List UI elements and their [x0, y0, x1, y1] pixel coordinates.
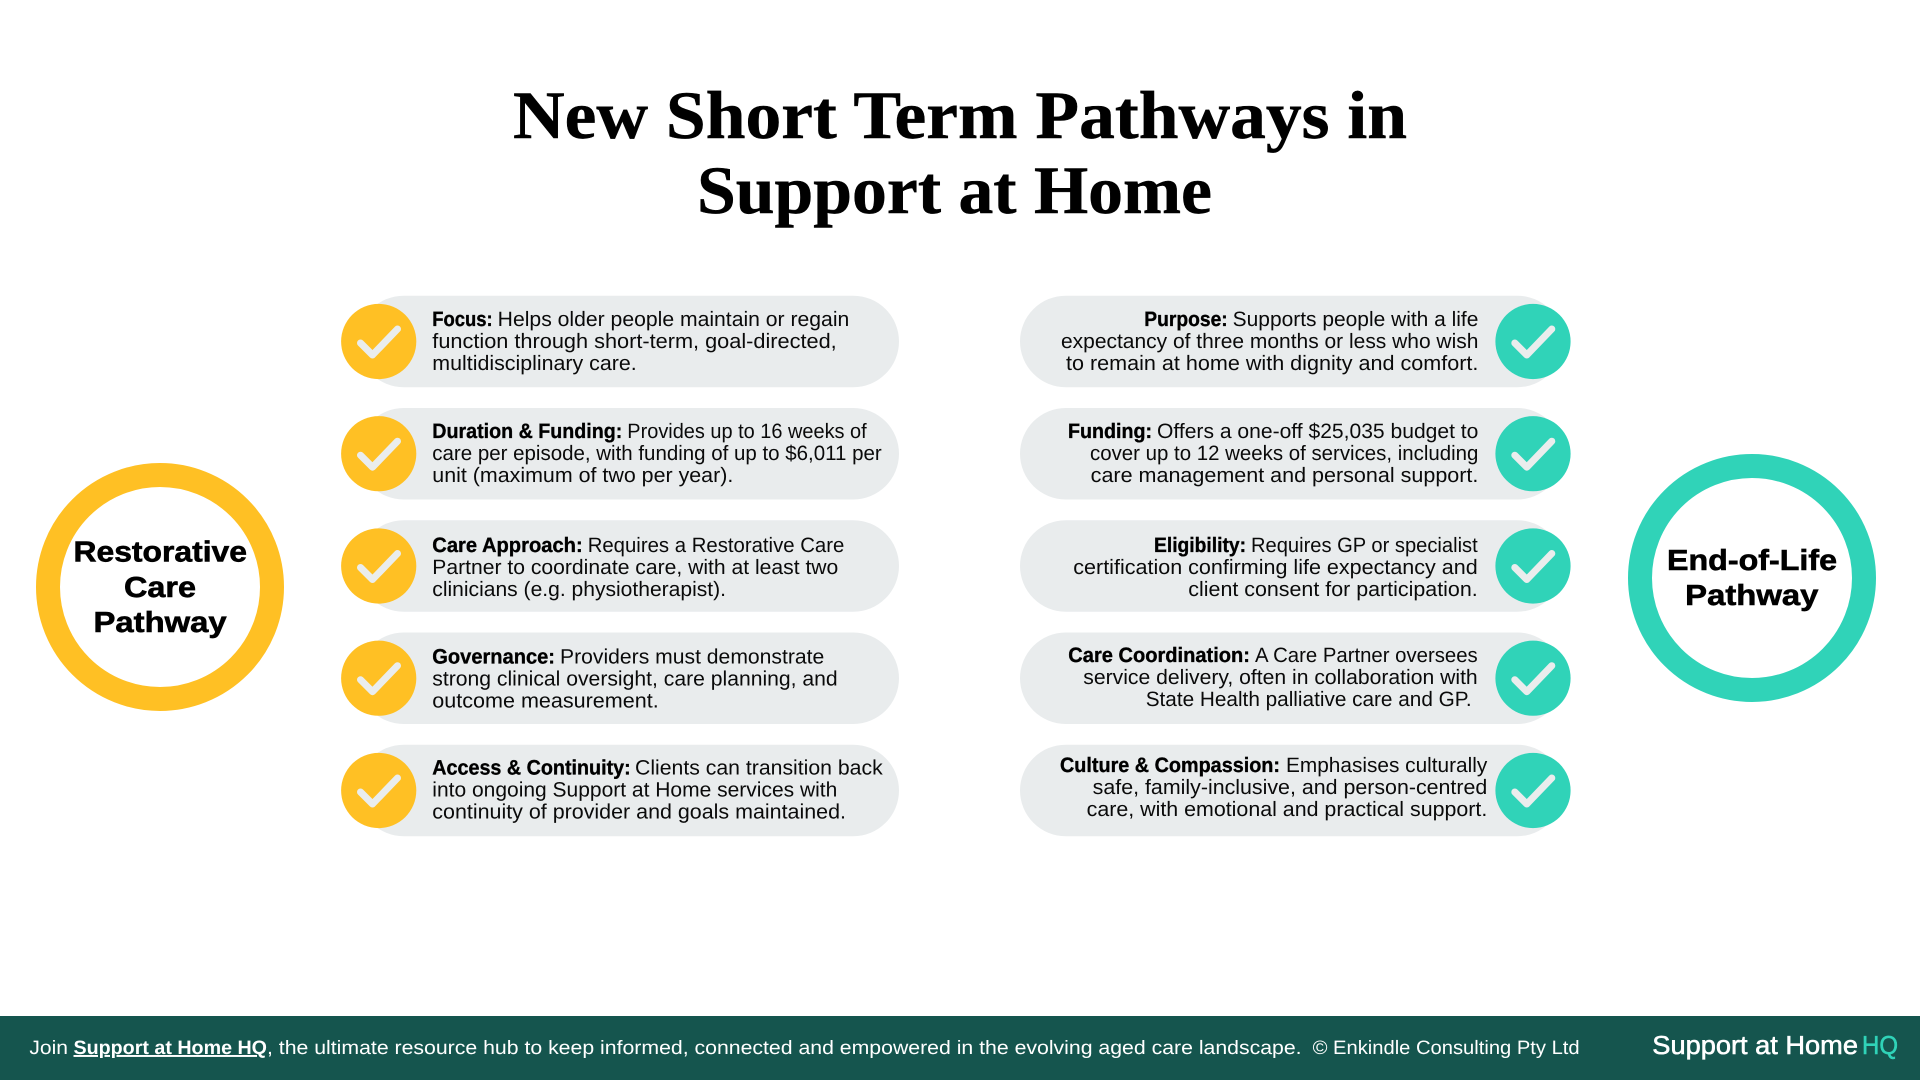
text: Governance: [432, 645, 838, 712]
logo: Support at Home HQ: HQ: [1862, 1030, 1898, 1060]
icon: yellow check: [341, 641, 416, 716]
footer text: © Enkindle Consulting Pty Ltd: [1313, 1037, 1580, 1059]
panel: End-of-Life Care Coordination: [1020, 632, 1571, 724]
icon: yellow check: [341, 753, 416, 828]
footer text: , the ultimate resource hub to keep informed, connected and empowered in the evolving aged care landscape.: [267, 1037, 1302, 1059]
title: [513, 77, 1407, 228]
text: Care Coordination: service delivery, often in collaboration with: [1083, 666, 1478, 689]
logo: Support at Home HQ: Support at Home: [1652, 1030, 1858, 1060]
text: Duration and Funding: unit (maximum of two per year).: [432, 464, 733, 487]
text: Governance: Providers must demonstrate: [560, 645, 824, 668]
text: Funding: care management and personal support.: [1091, 464, 1478, 487]
text: Purpose: Purpose:: [1144, 308, 1228, 331]
text: Focus: [432, 308, 849, 375]
text: Purpose: [1061, 308, 1478, 375]
icon: yellow check: [341, 416, 416, 491]
panel: Restorative Duration and Funding: [341, 408, 899, 500]
text: Care Coordination: State Health palliative care and GP.: [1146, 688, 1472, 711]
text: Focus: Focus:: [432, 308, 493, 331]
panel: End-of-Life Culture and Compassion: [1020, 745, 1571, 836]
text: Purpose: to remain at home with dignity and comfort.: [1066, 352, 1478, 375]
text: Governance: Governance:: [432, 645, 555, 668]
footer text: Support at Home HQ: [74, 1037, 267, 1059]
icon: teal check: [1495, 416, 1571, 491]
text: Care Approach: Requires a Restorative Care: [588, 534, 844, 557]
icon: teal check: [1495, 641, 1571, 716]
text: Duration and Funding: [432, 420, 882, 487]
text: Eligibility: Eligibility:: [1154, 534, 1246, 557]
footer bar: [0, 1016, 1920, 1080]
text: Duration and Funding: Provides up to 16 weeks of: [627, 420, 867, 443]
icon: teal check: [1495, 528, 1571, 604]
text: Focus: function through short-term, goal-directed,: [432, 330, 837, 353]
icon: teal check: [1495, 304, 1571, 379]
panel: Restorative Care Approach: [341, 520, 899, 612]
badge: Restorative Care Pathway: [48, 475, 272, 699]
text: Eligibility: Requires GP or specialist: [1251, 534, 1478, 557]
text: Funding: [1068, 420, 1478, 487]
text: Funding: Offers a one-off $25,035 budget to: [1157, 420, 1478, 443]
badge: End-of-Life Pathway: Pathway: [1685, 580, 1818, 612]
badge: Restorative Care Pathway: Restorative: [74, 537, 247, 569]
text: Culture and Compassion: care, with emotional and practical support.: [1087, 798, 1487, 821]
text: Funding: cover up to 12 weeks of services, including: [1090, 442, 1478, 465]
badge: End-of-Life Pathway: [1640, 466, 1864, 690]
text: Eligibility: client consent for participation.: [1188, 578, 1478, 601]
text: Culture and Compassion: Culture & Compassion:: [1060, 754, 1280, 777]
badge: Restorative Care Pathway: Care: [124, 572, 196, 604]
text: Focus: multidisciplinary care.: [432, 352, 637, 375]
footer text: [29, 1037, 1580, 1059]
text: Duration and Funding: care per episode, with funding of up to $6,011 per: [432, 442, 882, 465]
text: Funding: Funding:: [1068, 420, 1152, 443]
icon: yellow check: [341, 528, 416, 604]
panel: End-of-Life Eligibility: [1020, 520, 1571, 612]
text: Care Coordination: Care Coordination:: [1068, 644, 1250, 667]
text: Culture and Compassion: [1060, 754, 1488, 821]
text: Care Approach: clinicians (e.g. physiotherapist).: [432, 578, 726, 601]
text: Care Approach: Partner to coordinate care, with at least two: [432, 556, 838, 579]
text: Governance: strong clinical oversight, care planning, and: [432, 667, 838, 690]
text: Access and Continuity: into ongoing Support at Home services with: [432, 778, 837, 801]
text: Access and Continuity: Access & Continuity:: [432, 756, 631, 779]
text: Governance: outcome measurement.: [432, 689, 659, 712]
text: Care Approach: Care Approach:: [432, 534, 583, 557]
text: Access and Continuity: Clients can transition back: [635, 756, 883, 779]
icon: teal check: [1495, 753, 1571, 828]
text: Access and Continuity: continuity of provider and goals maintained.: [432, 800, 846, 823]
badge: End-of-Life Pathway: End-of-Life: [1667, 545, 1837, 577]
icon: yellow check: [341, 304, 416, 379]
text: Purpose: expectancy of three months or less who wish: [1061, 330, 1478, 353]
text: Care Coordination: A Care Partner oversees: [1255, 644, 1478, 667]
text: Care Coordination: [1068, 644, 1478, 711]
text: Culture and Compassion: safe, family-inclusive, and person-centred: [1093, 776, 1487, 799]
text: Eligibility: certification confirming life expectancy and: [1073, 556, 1478, 579]
text: Purpose: Supports people with a life: [1233, 308, 1478, 331]
panel: Restorative Access and Continuity: [341, 745, 899, 836]
title: Support at Home: [697, 152, 1212, 228]
text: Care Approach: [432, 534, 844, 601]
panel: Restorative Focus: [341, 296, 899, 387]
text: Culture and Compassion: Emphasises culturally: [1286, 754, 1488, 777]
panel: Restorative Governance: [341, 632, 899, 724]
text: Access and Continuity: [432, 756, 883, 823]
title: New Short Term Pathways in: [513, 77, 1407, 153]
text: Duration and Funding: Duration & Funding:: [432, 420, 622, 443]
badge: Restorative Care Pathway: Pathway: [94, 607, 227, 639]
text: Eligibility: [1073, 534, 1478, 601]
panel: End-of-Life Purpose: [1020, 296, 1571, 387]
panel: End-of-Life Funding: [1020, 408, 1571, 500]
footer text: Join: [29, 1037, 68, 1059]
text: Focus: Helps older people maintain or regain: [498, 308, 849, 331]
